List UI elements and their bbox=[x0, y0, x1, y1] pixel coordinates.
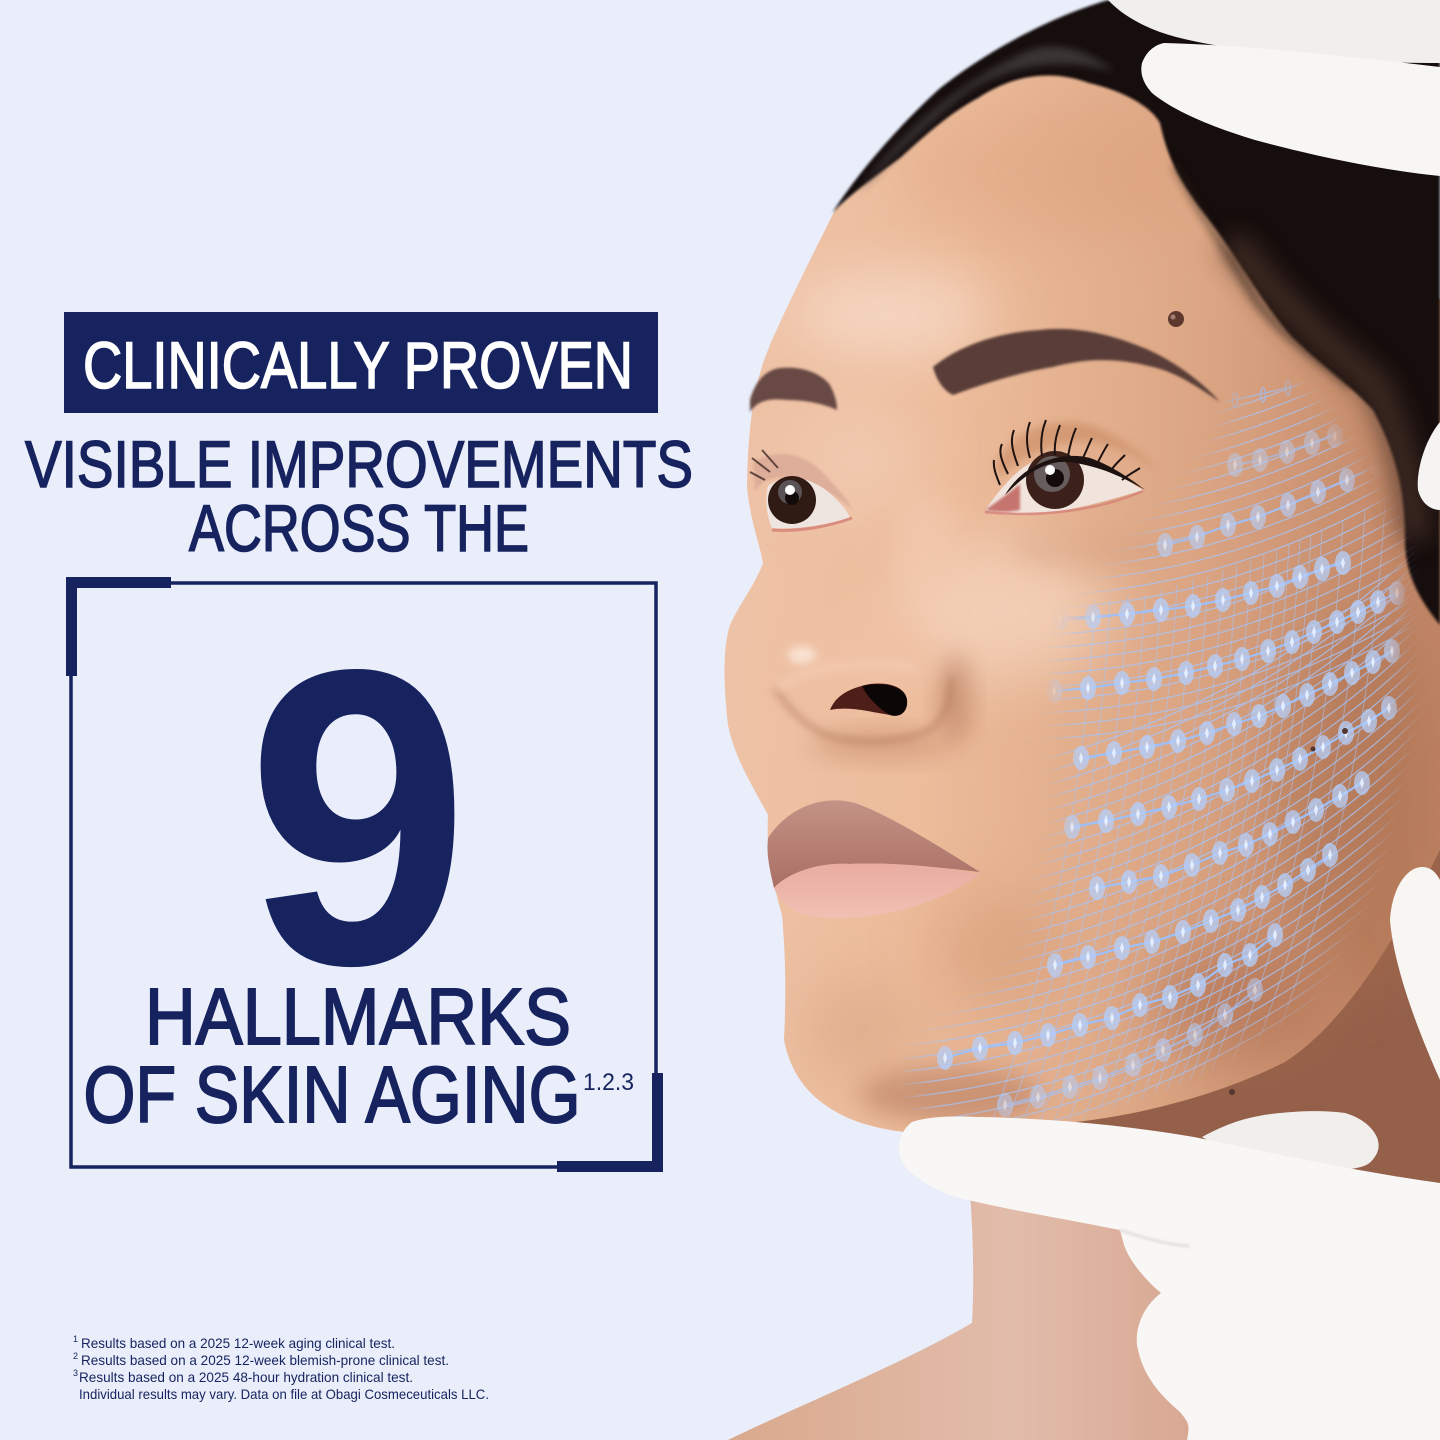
footnotes: 2 bbox=[73, 1351, 78, 1361]
top gloved finger bbox=[1141, 43, 1440, 176]
heading: hallmarks of skin aging bbox=[84, 972, 634, 1139]
footnotes: 1 bbox=[73, 1334, 78, 1344]
banner: clinically proven bbox=[64, 312, 658, 413]
heading: visible improvements across the: VISIBLE IMPROVEMENTS bbox=[25, 427, 693, 501]
right eye bbox=[985, 420, 1160, 515]
lips bbox=[767, 800, 980, 918]
right gloved finger bbox=[1390, 867, 1440, 1080]
banner: clinically proven: CLINICALLY PROVEN bbox=[83, 328, 633, 402]
face skin bbox=[724, 40, 1440, 1200]
top right glove bbox=[1108, 0, 1440, 63]
neck shadow behind jaw bbox=[1076, 850, 1440, 1183]
neck and shoulder bbox=[728, 1100, 1440, 1440]
footnotes bbox=[73, 1334, 489, 1402]
footnotes: Individual results may vary. Data on file at Obagi Cosmeceuticals LLC. bbox=[79, 1386, 489, 1402]
photo: woman's face with gloved hands bbox=[724, 0, 1440, 1440]
fine horizontal lines bbox=[900, 380, 1420, 1120]
nose bbox=[775, 610, 950, 741]
footnotes: 3 bbox=[73, 1368, 78, 1378]
heading: hallmarks of skin aging: 1.2.3 bbox=[583, 1069, 634, 1096]
fine vertical lines bbox=[985, 500, 1385, 1140]
left eyebrow bbox=[750, 368, 837, 412]
heading: hallmarks of skin aging: OF SKIN AGING bbox=[84, 1050, 580, 1139]
heading: visible improvements across the bbox=[25, 427, 693, 565]
footnotes: Results based on a 2025 12-week aging clinical test. bbox=[81, 1335, 395, 1351]
front finger and hand bbox=[899, 1117, 1440, 1440]
blue mesh overlay on cheek bbox=[900, 380, 1420, 1122]
heading: visible improvements across the: ACROSS THE bbox=[189, 491, 529, 565]
hair bbox=[832, 0, 1440, 625]
heading: hallmarks of skin aging: HALLMARKS bbox=[145, 972, 571, 1061]
skin highlights and shading bbox=[790, 100, 1440, 1200]
right eyebrow bbox=[933, 329, 1220, 402]
right edge glove fragment bbox=[1418, 422, 1440, 510]
frame: square outline with corner accents bbox=[66, 577, 663, 1172]
left eye bbox=[750, 450, 853, 530]
big number 9: 9 bbox=[247, 583, 469, 1053]
rows of dots bbox=[945, 436, 1397, 1105]
skin marks on cheek and neck bbox=[1229, 728, 1348, 1095]
rear finger bbox=[1202, 1111, 1379, 1170]
footnotes: Results based on a 2025 12-week blemish-prone clinical test. bbox=[81, 1352, 449, 1368]
footnotes: Results based on a 2025 48-hour hydration clinical test. bbox=[79, 1369, 413, 1385]
hair tones bbox=[860, 46, 1415, 540]
mole bbox=[1168, 311, 1184, 327]
small upper row bbox=[1225, 381, 1295, 407]
bottom glove hand bbox=[899, 1111, 1440, 1440]
